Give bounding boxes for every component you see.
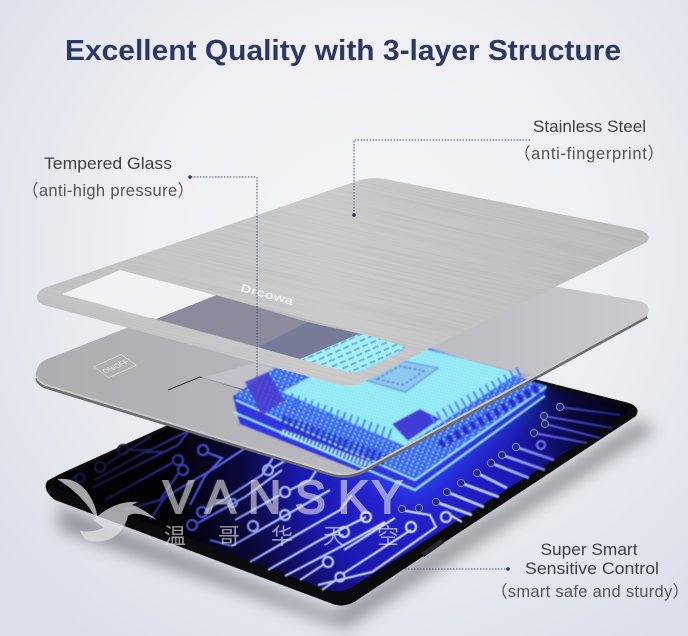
label: sensitive control (491, 540, 688, 601)
watermark name: N (248, 471, 281, 523)
chip patterned deck (233, 347, 547, 478)
side notch (421, 539, 444, 557)
display recess outline (168, 377, 245, 390)
upper trace row (290, 398, 395, 436)
watermark name: K (338, 471, 369, 523)
right trace row (432, 370, 522, 420)
glass plate markings (94, 349, 530, 390)
power button marking: ON/OFF (100, 358, 132, 375)
chip pale top (282, 349, 518, 446)
lavender strip near the right edge (415, 349, 530, 389)
left trace row (282, 420, 385, 460)
watermark name: A (205, 471, 236, 523)
white display opening (62, 270, 217, 319)
watermark (57, 471, 403, 549)
layer 2: tempered glass plate (36, 248, 648, 474)
steel plate with display cut-out (37, 178, 648, 385)
glowing chip (233, 347, 547, 493)
label: tempered glass: Tempered Glass (44, 154, 172, 173)
watermark name: Y (372, 471, 403, 523)
layer 1: stainless steel plate (36, 178, 648, 386)
label: stainless steel: Stainless Steel (533, 117, 646, 136)
chip solder balls (398, 403, 564, 513)
brand logo: Drcowa (239, 282, 296, 308)
watermark name: V (163, 471, 194, 523)
label: stainless steel (514, 117, 664, 163)
watermark chinese name: 哥 (218, 524, 240, 549)
purple die left (245, 372, 284, 416)
label: sensitive control: （smart safe and sturdy） (491, 582, 688, 601)
watermark chinese name: 天 (323, 524, 345, 549)
watermark chinese name: 华 (271, 524, 293, 549)
layer 3: black circuit base (46, 378, 638, 606)
see-through panels in the window (62, 270, 406, 373)
watermark logo (57, 479, 157, 541)
micro controller square (365, 360, 438, 392)
label: sensitive control: Super Smart (540, 540, 638, 559)
title: Excellent Quality with 3-layer Structure (65, 35, 621, 67)
label: tempered glass (22, 154, 194, 200)
power button marking (94, 354, 136, 378)
dark die lower (392, 409, 440, 441)
leader: stainless steel (352, 140, 530, 217)
label: sensitive control: Sensitive Control (525, 559, 659, 578)
glass front edge (37, 315, 647, 476)
label: tempered glass: （anti-high pressure） (22, 181, 194, 200)
watermark chinese name: 温 (164, 524, 186, 549)
chip outer slab (233, 347, 547, 493)
chip glow (240, 390, 550, 497)
circuit traces (60, 407, 620, 590)
base body (46, 378, 638, 606)
chip cyan side edges (233, 387, 546, 490)
label: stainless steel: （anti-fingerprint） (514, 144, 664, 163)
circuit board surface (53, 382, 628, 591)
blue-grey band (258, 322, 361, 360)
leader: tempered glass (188, 175, 257, 420)
watermark chinese name: 空 (377, 524, 399, 549)
shadow under the base (58, 420, 655, 628)
watermark name: S (295, 471, 326, 523)
bright circuit window (298, 333, 406, 373)
dark grey band (156, 295, 307, 347)
leader: sensitive control (405, 567, 510, 571)
